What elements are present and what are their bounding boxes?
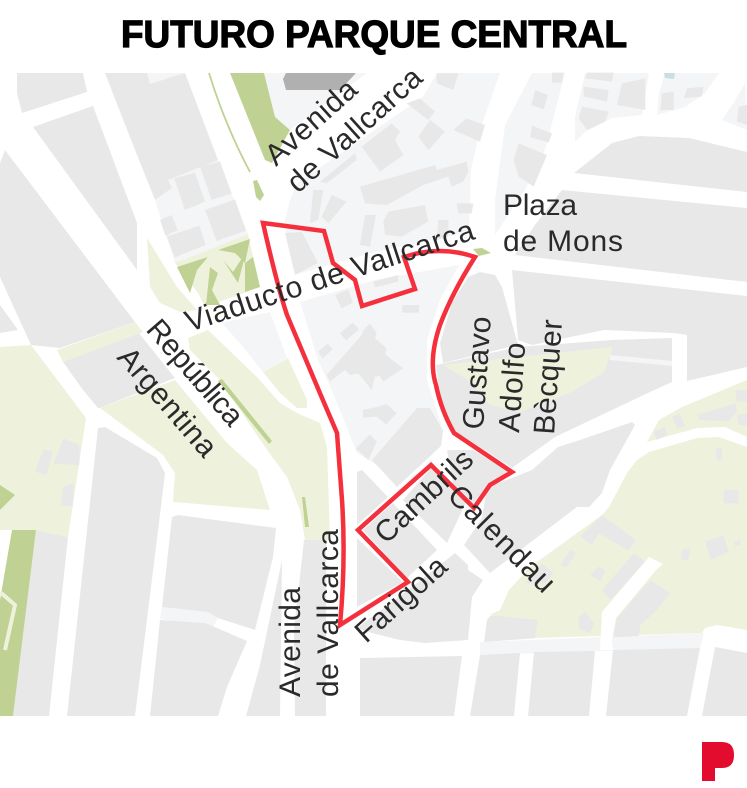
label: Avenida de Vallcarca (south) — [274, 529, 345, 697]
dark green areas — [0, 73, 491, 716]
label: Gustavo Adolfo Bécquer: Bècquer — [528, 318, 569, 435]
label: República Argentina: Argentina — [111, 341, 224, 464]
light stripe in block — [610, 355, 672, 366]
label: Cambrils: Cambrils — [368, 443, 480, 550]
water — [664, 73, 675, 79]
title: FUTURO PARQUE CENTRAL — [121, 14, 627, 56]
label: República Argentina: República — [140, 313, 250, 433]
project boundary — [263, 223, 512, 625]
label: Avenida de Vallcarca (north): de Vallcarca — [281, 61, 429, 199]
label: Gustavo Adolfo Bécquer — [457, 315, 569, 435]
label: Plaza de Mons: Plaza — [503, 189, 577, 222]
label: Viaducto de Vallcarca: Viaducto de Vallcarca — [181, 214, 479, 339]
label: Gustavo Adolfo Bécquer: Gustavo — [457, 315, 498, 430]
label: Avenida de Vallcarca (north): Avenida — [259, 73, 364, 172]
light green parks — [0, 234, 747, 638]
buildings on the park — [525, 390, 747, 637]
logo — [702, 742, 734, 781]
label: Plaza de Mons: de Mons — [503, 225, 623, 258]
buildings — [310, 73, 485, 247]
label: Calendau: Calendau — [441, 479, 562, 600]
label: Plaza de Mons — [503, 189, 623, 258]
building: grey landmark — [283, 73, 356, 90]
label: República Argentina — [111, 313, 250, 464]
light urban areas — [147, 73, 747, 655]
label: Gustavo Adolfo Bécquer: Adolfo — [493, 341, 532, 433]
label: Avenida de Vallcarca (south): de Vallcarca — [312, 529, 345, 697]
label: Avenida de Vallcarca (south): Avenida — [274, 587, 307, 697]
label: Farigola: Farigola — [349, 550, 454, 649]
secondary road — [600, 557, 663, 650]
